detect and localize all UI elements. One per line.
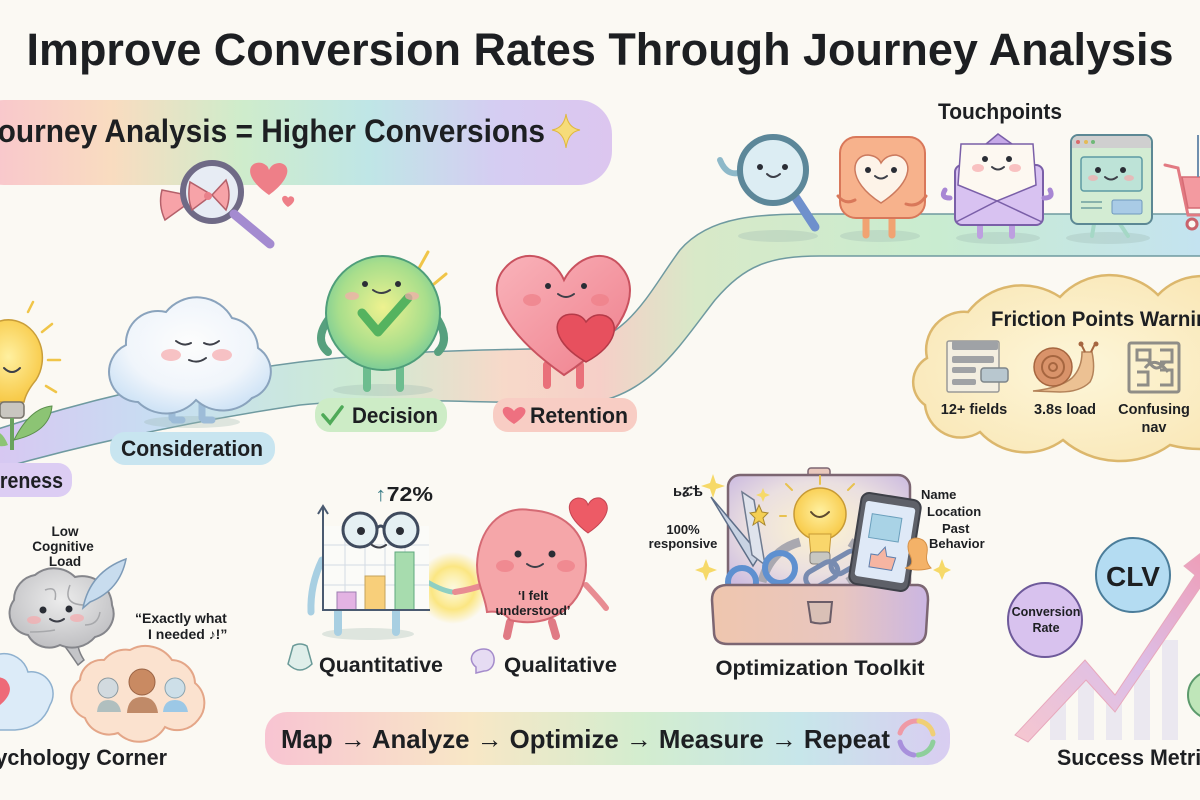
faint bars bbox=[1050, 640, 1178, 740]
icon: maze navigation bbox=[1129, 343, 1179, 392]
label: low cognitive load: Low bbox=[52, 524, 79, 539]
label: 12+ fields: 12+ fields bbox=[941, 402, 1007, 418]
label: personalization list: Name bbox=[921, 487, 956, 502]
title: Improve Conversion Rates Through Journey Analysis bbox=[26, 24, 1174, 75]
banner: journey analysis equals higher conversions bbox=[0, 100, 612, 185]
icon: chain links bbox=[803, 548, 862, 590]
icon: sparkle bbox=[552, 114, 580, 148]
heading: touchpoints: Touchpoints bbox=[938, 99, 1062, 124]
label: personalization list: Past bbox=[942, 521, 970, 536]
icon: person badge bbox=[905, 538, 931, 570]
label: qualitative: Qualitative bbox=[504, 654, 617, 677]
label: garbled glyph: ьፚѣ bbox=[673, 483, 703, 500]
metric: conversion rate: Rate bbox=[1032, 621, 1060, 635]
panel: psychology corner bbox=[0, 524, 227, 770]
icon: long form bbox=[947, 341, 1008, 392]
label: quantitative: Quantitative bbox=[319, 654, 443, 677]
icon: snail bbox=[1033, 342, 1098, 392]
icon: lightbulb with sprout bbox=[0, 302, 60, 450]
label: retention: Retention bbox=[530, 403, 628, 428]
touchpoints section bbox=[720, 99, 1200, 244]
label: confusing nav: nav bbox=[1142, 420, 1166, 436]
icon: toolbox bbox=[695, 468, 951, 644]
label: confusing nav: Confusing bbox=[1118, 402, 1190, 418]
metric: CLV bbox=[1096, 538, 1170, 612]
icon: phone bbox=[848, 492, 922, 592]
handshake glow bbox=[417, 552, 489, 624]
metric: CLV: CLV bbox=[1106, 561, 1160, 592]
chart: growth arrow bbox=[1015, 546, 1200, 742]
icon: green check character bbox=[321, 252, 446, 396]
stage: decision bbox=[315, 252, 447, 432]
process pill: map analyze optimize measure repeat: Map → Analyze → Optimize → Measure → Repeat bbox=[281, 724, 890, 754]
label: 3.8s load: 3.8s load bbox=[1034, 402, 1096, 418]
icon: blue heart cloud bbox=[0, 654, 53, 730]
process pill: map analyze optimize measure repeat bbox=[265, 712, 950, 765]
label: up 72 percent: ↑72% bbox=[375, 484, 433, 506]
label: consideration bbox=[110, 432, 275, 465]
metric: conversion rate bbox=[1008, 583, 1082, 657]
quote: exactly what I needed: “Exactly what bbox=[135, 610, 227, 626]
icon: bow magnifier with hearts bbox=[161, 163, 294, 244]
label: 100 percent responsive: responsive bbox=[649, 536, 717, 551]
toolbox body bbox=[712, 585, 928, 644]
journey road bbox=[0, 214, 1200, 470]
quote: exactly what I needed: I needed ♪!” bbox=[148, 626, 227, 642]
icon: people in peach cloud bbox=[71, 646, 204, 742]
panel: success metrics bbox=[1008, 538, 1200, 770]
icon: cycle arrows bbox=[900, 721, 933, 755]
label: consideration: Consideration bbox=[121, 436, 263, 461]
icon: toolkit lightbulb bbox=[780, 476, 854, 564]
icon: heart card character bbox=[838, 137, 926, 242]
icon: qualitative speech bubble character bbox=[455, 498, 607, 636]
heading: optimization toolkit: Optimization Toolkit bbox=[716, 657, 924, 680]
icon: shopping cart bbox=[1165, 135, 1200, 229]
label: decision: Decision bbox=[352, 403, 438, 428]
icon: heart character hugging heart bbox=[497, 256, 630, 385]
label: low cognitive load: Load bbox=[49, 554, 81, 569]
icon: magnifier character bbox=[720, 137, 818, 242]
label: qualitative bbox=[471, 649, 617, 677]
label: quantitative bbox=[288, 644, 443, 677]
icon: brain with feather bbox=[10, 559, 126, 665]
label: personalization list: Location bbox=[927, 504, 981, 519]
icon: browser character bbox=[1066, 135, 1152, 244]
icon: scissors bbox=[711, 492, 795, 596]
stage: consideration bbox=[109, 297, 275, 465]
metric: green circle bbox=[1188, 671, 1200, 719]
icon: qualitative speech bubble character: understood’ bbox=[495, 603, 571, 618]
panel: quantitative and qualitative bbox=[288, 484, 617, 677]
panel: friction points warning bbox=[913, 275, 1200, 461]
icon: envelope character bbox=[943, 134, 1051, 244]
stage: awareness bbox=[0, 302, 72, 497]
metric: conversion rate: Conversion bbox=[1012, 605, 1080, 619]
icon: sparkles bbox=[695, 474, 951, 581]
label: low cognitive load: Cognitive bbox=[32, 539, 94, 554]
label: decision bbox=[315, 398, 447, 432]
chart: quantitative bar character bbox=[311, 506, 452, 640]
label: 100 percent responsive: 100% bbox=[666, 522, 700, 537]
panel: optimization toolkit bbox=[649, 468, 985, 680]
label: personalization list: Behavior bbox=[929, 536, 985, 551]
stage: retention bbox=[493, 256, 637, 432]
label: retention bbox=[493, 398, 637, 432]
icon: qualitative speech bubble character: ‘I felt bbox=[518, 588, 549, 603]
icon: thinking cloud bbox=[109, 297, 271, 428]
